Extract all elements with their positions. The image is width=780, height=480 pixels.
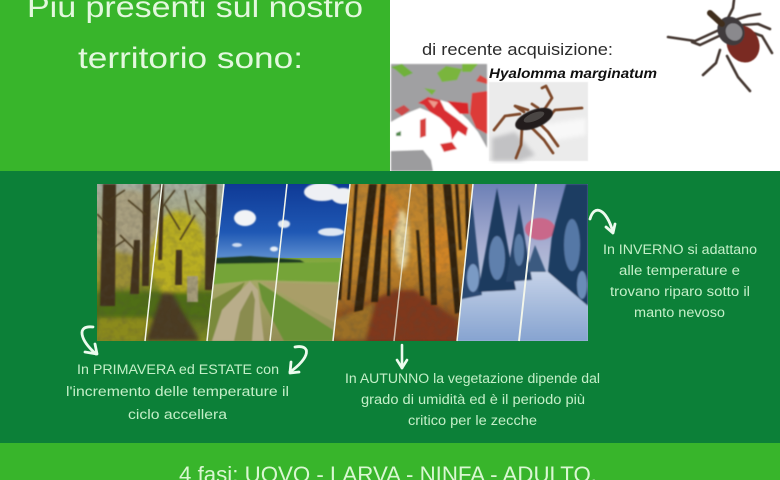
icon: tick photo top right: [668, 0, 772, 91]
text: species name: Hyalomma marginatum: [489, 65, 657, 81]
text: spring and summer: [66, 362, 289, 422]
arrow: to spring text: [82, 327, 97, 354]
text: spring and summer: In PRIMAVERA ed ESTATE con: [77, 362, 279, 377]
arrow: winter to text: [590, 210, 615, 233]
map: distribution in Italy: [391, 64, 487, 171]
texture: spring foliage: [97, 184, 227, 341]
text: winter: [603, 242, 757, 320]
text: autumn: critico per le zecche: [408, 413, 537, 428]
text: spring and summer: l'incremento delle temperature il: [66, 384, 289, 399]
text: winter: In INVERNO si adattano: [603, 242, 757, 257]
texture: autumn foliage: [330, 184, 476, 341]
panel: bottom life stages: [0, 443, 780, 480]
text: autumn: grado di umidità ed è il periodo più: [361, 392, 585, 407]
text: autumn: [345, 371, 600, 428]
text: recently acquired: di recente acquisizione:: [422, 41, 613, 59]
panel: top left green: [0, 0, 390, 171]
photo: summer: [205, 183, 355, 341]
arrow: summer to text: [290, 347, 306, 373]
panel: top right white: [390, 0, 780, 171]
photo: Hyalomma tick: [489, 82, 588, 161]
panel: seasons dark green: [0, 171, 780, 443]
text: spring and summer: ciclo accellera: [128, 407, 228, 422]
photo: spring: [96, 184, 227, 341]
photo: winter: [455, 184, 588, 341]
arrow: autumn to text: [397, 345, 407, 368]
text: autumn: In AUTUNNO la vegetazione dipende dal: [345, 371, 600, 386]
photo: autumn: [330, 184, 476, 341]
text: winter: alle temperature e: [619, 263, 740, 278]
heading: most present ticks: territorio sono:: [78, 42, 303, 75]
text: winter: manto nevoso: [634, 305, 725, 320]
text: winter: trovano riparo sotto il: [610, 284, 750, 299]
photo strip: four seasons: [96, 183, 588, 341]
season divider lines: [145, 184, 536, 341]
heading: most present ticks: [27, 0, 363, 75]
